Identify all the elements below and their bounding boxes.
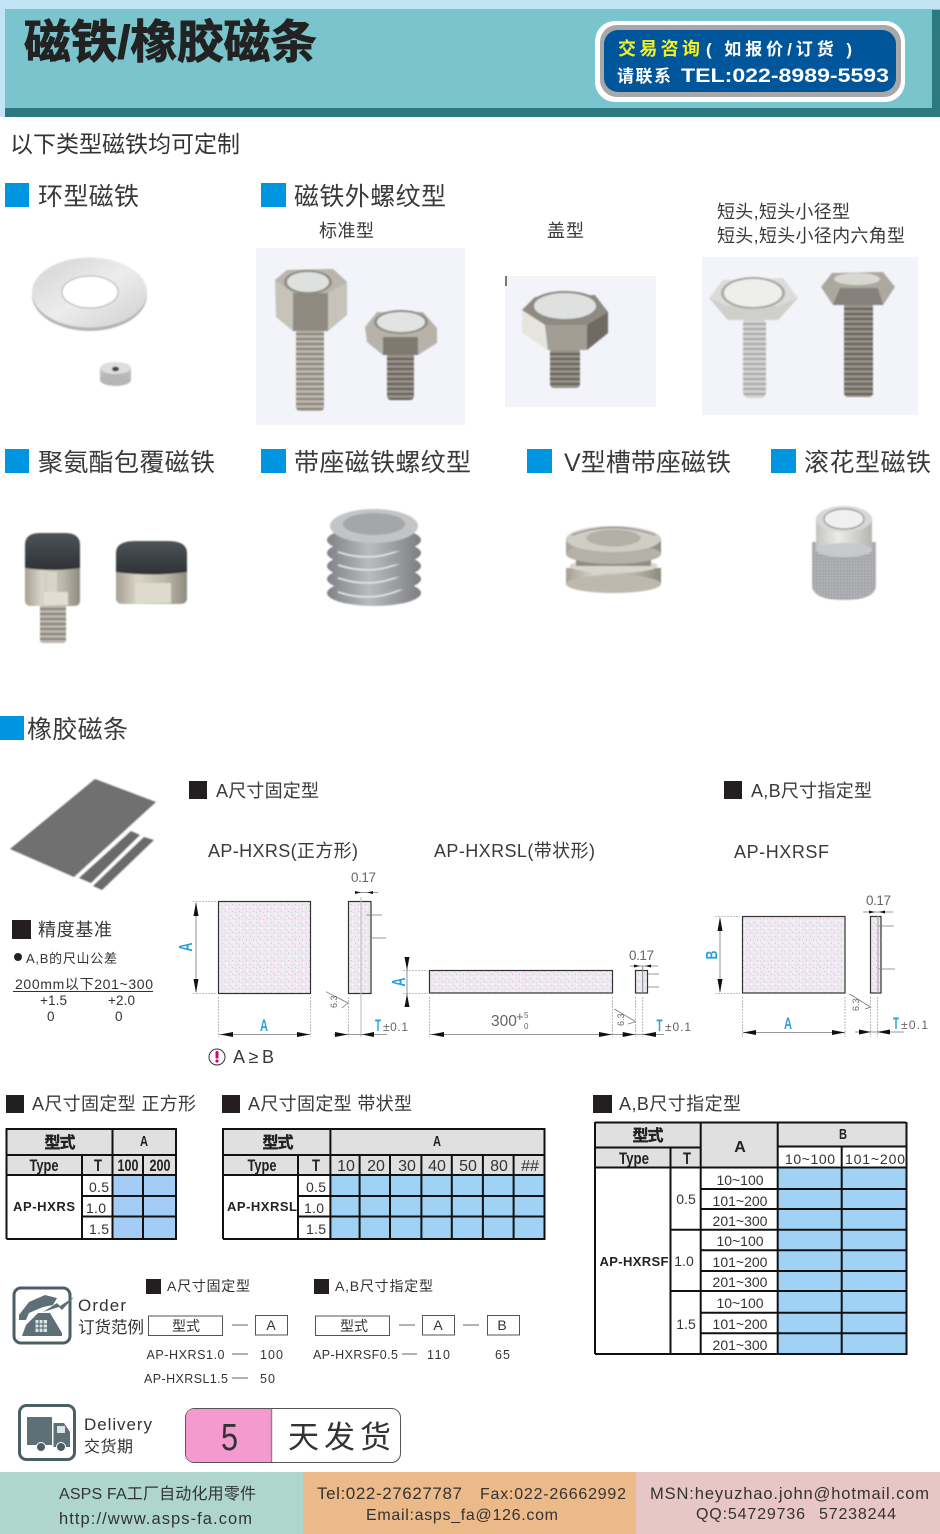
- table: AP-HXRS: Type: [30, 1156, 58, 1175]
- panel: precision standard: A,B的尺山公差: [26, 951, 117, 966]
- diagram: AP-HXRSF rectangle: 6.3: [851, 998, 861, 1011]
- panel: precision standard: 0: [115, 1009, 123, 1024]
- table: AP-HXRSF: 101~200: [713, 1316, 768, 1332]
- order example: A fixed: 50: [260, 1372, 275, 1386]
- intro text: 以下类型磁铁均可定制: [10, 131, 240, 157]
- table: AP-HXRSL: 0.5: [306, 1179, 326, 1195]
- heading: table square: A尺寸固定型 正方形: [32, 1094, 196, 1114]
- table: AP-HXRSF: 10~100: [716, 1295, 764, 1311]
- table: AP-HXRS: 0.5: [89, 1179, 109, 1195]
- diagram: AP-HXRSL strip: ±0.1: [665, 1020, 691, 1034]
- diagram: AP-HXRSF rectangle: [704, 893, 928, 1037]
- label: AP-HXRSF: AP-HXRSF: [734, 842, 829, 862]
- diagram: AP-HXRSL strip: 0: [524, 1022, 529, 1031]
- table: AP-HXRSF: AP-HXRSF: [600, 1254, 669, 1269]
- footer: MSN and QQ: 57238244: [819, 1506, 896, 1523]
- diagram: AP-HXRSL strip: A: [389, 978, 409, 986]
- diagram: AP-HXRS square: 6.3: [329, 995, 339, 1008]
- heading: urethane magnet: 聚氨酯包覆磁铁: [38, 449, 215, 477]
- table: AP-HXRS: 型式: [44, 1134, 76, 1152]
- order example: A fixed: A: [266, 1317, 276, 1333]
- order example: A,B specified: 型式: [340, 1318, 368, 1334]
- heading: knurled magnet: 滚花型磁铁: [804, 449, 931, 477]
- diagram: AP-HXRS square: [176, 870, 408, 1037]
- photo: rubber sheet: [10, 779, 156, 890]
- table: AP-HXRSF: 201~300: [713, 1213, 768, 1229]
- table: AP-HXRS: A: [140, 1133, 148, 1150]
- icon: telephone: [14, 1288, 74, 1343]
- heading: A fixed type: A尺寸固定型: [216, 781, 319, 801]
- table: AP-HXRSL: 50: [459, 1158, 477, 1175]
- table: AP-HXRSF: 10~100: [785, 1151, 835, 1167]
- diagram: AP-HXRS square: T: [375, 1016, 381, 1035]
- title: 磁铁/橡胶磁条: [24, 16, 317, 68]
- table: AP-HXRSL: AP-HXRSL: [227, 1199, 297, 1214]
- footer: company: http://www.asps-fa.com: [59, 1510, 252, 1528]
- table: AP-HXRSL: T: [312, 1156, 320, 1175]
- table: AP-HXRS: 1.5: [89, 1221, 109, 1237]
- footer: MSN and QQ: MSN:heyuzhao.john@hotmail.com: [650, 1485, 929, 1503]
- note: A greater or equal B: A≥B: [233, 1047, 274, 1067]
- label: delivery: 交货期: [84, 1438, 133, 1456]
- photo: short head bolts: [702, 257, 918, 415]
- table: AP-HXRS: 100: [118, 1156, 138, 1175]
- table: AP-HXRSL: Type: [248, 1156, 276, 1175]
- table: AP-HXRSL: 20: [367, 1158, 385, 1175]
- delivery badge: 天发货: [288, 1420, 391, 1455]
- footer: company: [0, 1472, 303, 1534]
- diagram: AP-HXRSL strip: 5: [524, 1011, 529, 1020]
- note: A greater or equal B: [209, 1047, 274, 1067]
- photo: ring magnets: [32, 258, 147, 386]
- panel: precision standard: 0: [47, 1009, 55, 1024]
- heading: rubber magnet strip: 橡胶磁条: [27, 716, 128, 744]
- photo: knurled magnet: [812, 506, 876, 600]
- table: AP-HXRSF: 0.5: [676, 1191, 696, 1207]
- panel: precision standard: [12, 920, 153, 1024]
- footer: company: ASPS FA工厂自动化用零件: [59, 1485, 256, 1503]
- footer: telephone and email: Fax:022-26662992: [480, 1486, 626, 1503]
- diagram: AP-HXRSL strip: 300: [491, 1013, 517, 1030]
- order example: A fixed: A尺寸固定型: [167, 1278, 250, 1294]
- table: AP-HXRSF: 型式: [632, 1127, 664, 1145]
- photo: urethane magnets: [25, 533, 187, 643]
- label: short head types: 短头,短头小径内六角型: [717, 226, 905, 246]
- order example: A,B specified: [313, 1278, 520, 1362]
- diagram: AP-HXRS square: 0.17: [351, 870, 376, 885]
- label: order: 订货范例: [78, 1318, 144, 1337]
- panel: precision standard: +1.5: [40, 993, 67, 1008]
- order example: A,B specified: 110: [427, 1348, 450, 1362]
- heading: seat thread magnet: 带座磁铁螺纹型: [294, 449, 471, 477]
- order example: A,B specified: A,B尺寸指定型: [335, 1278, 433, 1294]
- label: delivery: [84, 1415, 152, 1456]
- diagram: AP-HXRSF rectangle: T: [893, 1014, 899, 1033]
- contact badge: ( 如报价/订货 ): [706, 39, 852, 59]
- order example: A fixed: AP-HXRS1.0: [146, 1348, 225, 1362]
- footer: telephone and email: [303, 1472, 636, 1534]
- table: AP-HXRS: 200: [150, 1156, 170, 1175]
- table: AP-HXRSF: 1.5: [676, 1316, 696, 1332]
- table: AP-HXRSF: 10~100: [716, 1233, 764, 1249]
- label: short head types: [717, 202, 905, 246]
- table: AP-HXRS: [6, 1128, 176, 1240]
- footer: MSN and QQ: [636, 1472, 940, 1534]
- label: cap type: 盖型: [547, 221, 584, 241]
- contact badge: [595, 21, 905, 102]
- diagram: AP-HXRSL strip: 6.3: [616, 1013, 626, 1026]
- contact badge: TEL:022-8989-5593: [681, 66, 889, 87]
- footer: telephone and email: Email:asps_fa@126.com: [366, 1507, 558, 1524]
- label: order: [78, 1296, 144, 1337]
- label: short head types: 短头,短头小径型: [717, 202, 850, 222]
- heading: table specified: A,B尺寸指定型: [619, 1094, 741, 1114]
- order example: A,B specified: 65: [495, 1348, 510, 1362]
- footer: MSN and QQ: QQ:54729736: [696, 1506, 805, 1523]
- table: AP-HXRS: 1.0: [86, 1200, 106, 1216]
- table: AP-HXRSL: 10: [337, 1158, 355, 1175]
- table: AP-HXRSL: 1.0: [304, 1200, 324, 1216]
- diagram: AP-HXRSL strip: T: [656, 1016, 663, 1035]
- table: AP-HXRSL: 40: [428, 1158, 446, 1175]
- table: AP-HXRSL: [223, 1128, 545, 1240]
- diagram: AP-HXRSL strip: 0.17: [629, 948, 654, 963]
- delivery badge: [186, 1408, 400, 1462]
- order example: A,B specified: AP-HXRSF0.5: [313, 1348, 398, 1362]
- photo: cap type: [505, 276, 656, 407]
- photo: standard bolts: [256, 248, 465, 425]
- contact badge: 请联系: [617, 66, 671, 86]
- table: AP-HXRSF: 1.0: [674, 1253, 694, 1269]
- table: AP-HXRSL: 型式: [262, 1134, 294, 1152]
- heading: A,B specified type: A,B尺寸指定型: [751, 781, 872, 801]
- order example: A,B specified: A: [433, 1317, 443, 1333]
- table: AP-HXRS: AP-HXRS: [13, 1199, 75, 1214]
- heading: ring magnet: 环型磁铁: [38, 183, 139, 211]
- table: AP-HXRSL: A: [433, 1133, 441, 1150]
- diagram: AP-HXRSF rectangle: 0.17: [866, 893, 891, 908]
- diagram: AP-HXRSL strip: [389, 948, 691, 1037]
- order example: A fixed: 型式: [172, 1318, 200, 1334]
- icon: delivery truck: [20, 1406, 74, 1460]
- table: AP-HXRSF: T: [683, 1149, 691, 1168]
- label: AP-HXRS: AP-HXRS(正方形): [208, 841, 358, 861]
- footer: telephone and email: Tel:022-27627787: [317, 1484, 462, 1503]
- table: AP-HXRSF: B: [839, 1126, 847, 1143]
- order example: A,B specified: B: [497, 1317, 507, 1333]
- table: AP-HXRSL: 30: [398, 1158, 416, 1175]
- table: AP-HXRSF: 101~200: [713, 1254, 768, 1270]
- table: AP-HXRSF: 201~300: [713, 1274, 768, 1290]
- order example: A fixed: [144, 1278, 288, 1386]
- panel: precision standard: +2.0: [108, 993, 135, 1008]
- diagram: AP-HXRSF rectangle: A: [784, 1014, 792, 1033]
- table: AP-HXRSF: A: [734, 1139, 746, 1156]
- diagram: AP-HXRS square: ±0.1: [383, 1020, 408, 1034]
- table: AP-HXRSL: 80: [490, 1158, 508, 1175]
- order example: A fixed: AP-HXRSL1.5: [144, 1372, 228, 1386]
- diagram: AP-HXRS square: A: [260, 1016, 268, 1035]
- table: AP-HXRSF: 201~300: [713, 1337, 768, 1353]
- label: order: Order: [78, 1296, 126, 1315]
- header banner: [0, 0, 940, 117]
- table: AP-HXRSL: 1.5: [306, 1221, 326, 1237]
- table: AP-HXRSF: 101~200: [713, 1193, 768, 1209]
- heading: table strip: A尺寸固定型 带状型: [248, 1094, 412, 1114]
- label: delivery: Delivery: [84, 1415, 152, 1434]
- table: AP-HXRSL: ##: [521, 1158, 539, 1175]
- photo: threaded seat magnet: [327, 509, 421, 606]
- diagram: AP-HXRSL strip: +: [516, 1009, 524, 1024]
- order example: A fixed: 100: [260, 1348, 283, 1362]
- panel: precision standard: 精度基准: [38, 920, 112, 940]
- photo: V groove magnet: [566, 526, 661, 593]
- label: AP-HXRSL: AP-HXRSL(带状形): [434, 841, 595, 861]
- diagram: AP-HXRSF rectangle: B: [704, 950, 721, 960]
- table: AP-HXRS: T: [94, 1156, 102, 1175]
- table: AP-HXRSF: Type: [619, 1149, 649, 1168]
- mark: stray corner: [505, 276, 507, 286]
- table: AP-HXRSF: [595, 1122, 907, 1355]
- diagram: AP-HXRS square: A: [176, 942, 196, 952]
- delivery badge: 5: [221, 1417, 238, 1459]
- table: AP-HXRSF: 10~100: [716, 1172, 764, 1188]
- heading: V groove magnet: V型槽带座磁铁: [564, 449, 731, 477]
- table: AP-HXRSF: 101~200: [845, 1151, 905, 1167]
- heading: external thread magnet: 磁铁外螺纹型: [294, 183, 446, 211]
- contact badge: 交易咨询: [618, 38, 700, 59]
- panel: precision standard: 200mm以下201~300: [15, 976, 153, 992]
- label: standard: 标准型: [319, 221, 374, 241]
- diagram: AP-HXRSF rectangle: ±0.1: [901, 1018, 928, 1032]
